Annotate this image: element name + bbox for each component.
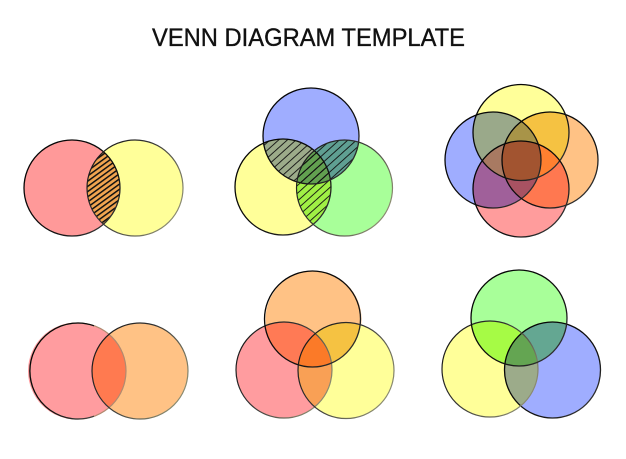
venn: three circles orange red yellow <box>236 271 394 418</box>
venn: four circles <box>445 84 598 237</box>
title: VENN DIAGRAM TEMPLATE <box>152 24 465 52</box>
venn: three circles hatched <box>235 88 392 236</box>
venn: three circles green yellow blue <box>442 270 600 418</box>
venn: two circles hatched <box>24 140 183 236</box>
venn: two circles red and orange <box>28 322 188 420</box>
